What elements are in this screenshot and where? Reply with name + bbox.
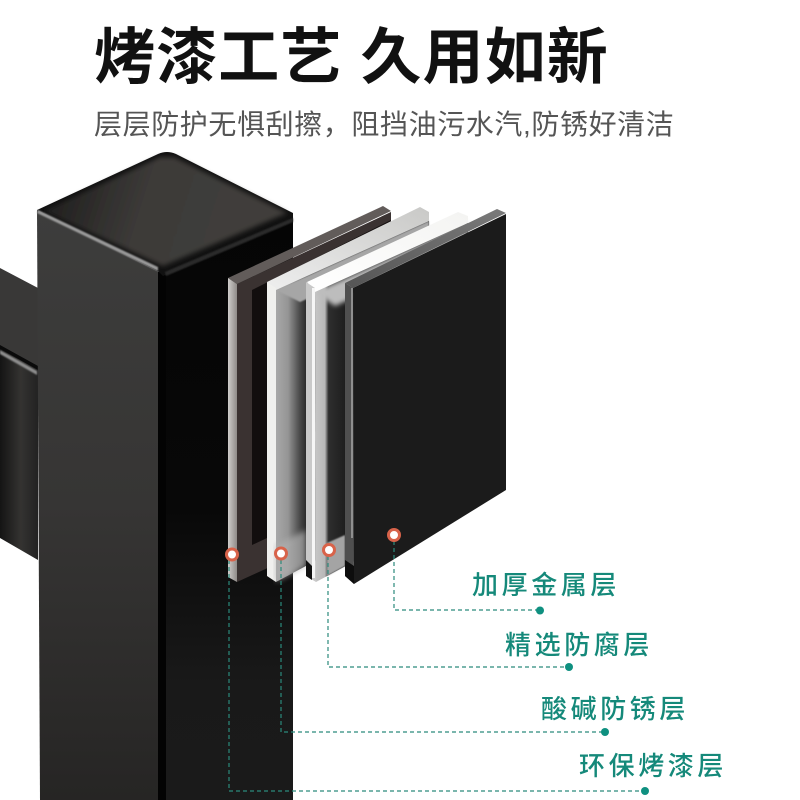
label: 环保烤漆层: 环保烤漆层 — [579, 751, 727, 781]
leader line: 精选防腐层 — [328, 556, 573, 671]
plate 3: light anodised layer — [306, 212, 468, 582]
marker dot: layer 4 — [388, 530, 400, 540]
marker dot: layer 3 — [324, 544, 334, 556]
leader line: 酸碱防锈层 — [281, 560, 609, 736]
marker dot: layer 1 — [226, 549, 238, 560]
plate 4: black baked paint layer — [345, 209, 506, 584]
subtitle: 层层防护无惧刮擦，阻挡油污水汽,防锈好清洁 — [94, 109, 674, 140]
marker dot: layer 2 — [276, 548, 286, 559]
arm: side bracket behind the post — [0, 268, 38, 560]
post: square black tube — [37, 152, 293, 800]
leader line: 加厚金属层 — [394, 541, 544, 614]
leader line: 环保烤漆层 — [229, 560, 649, 795]
title: 烤漆工艺 久用如新 — [94, 23, 609, 91]
plate 2: brushed silver layer — [267, 207, 429, 582]
plate 1: brown metal layer — [228, 206, 391, 582]
label: 酸碱防锈层: 酸碱防锈层 — [541, 694, 689, 724]
label: 加厚金属层: 加厚金属层 — [472, 570, 620, 600]
label: 精选防腐层: 精选防腐层 — [505, 630, 653, 660]
